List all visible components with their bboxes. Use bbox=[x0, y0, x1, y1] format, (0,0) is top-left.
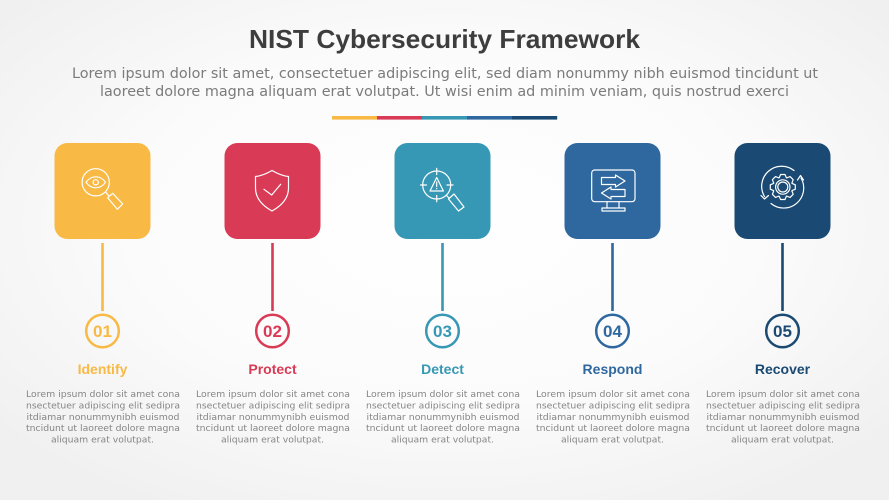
description: aliquam erat volutpat. bbox=[221, 434, 324, 446]
description: tncidunt ut laoreet dolore magna bbox=[366, 423, 520, 434]
icon tile: detect bbox=[394, 143, 490, 239]
icon: eye magnifier bbox=[82, 169, 123, 209]
icon tile: recover bbox=[734, 143, 830, 239]
panel: recover bbox=[706, 143, 860, 446]
description bbox=[196, 389, 350, 446]
icon tile: protect bbox=[224, 143, 320, 239]
description: itdiamar nonummynibh euismod bbox=[196, 412, 350, 423]
panel: detect bbox=[366, 143, 520, 446]
number badge 01: 01 bbox=[93, 322, 112, 341]
description: itdiamar nonummynibh euismod bbox=[26, 412, 180, 423]
subtitle text: Lorem ipsum dolor sit amet, consectetuer adipiscing elit, sed diam nonummy nibh euismod tincidunt ut bbox=[72, 66, 818, 82]
number badge 02 bbox=[256, 315, 289, 347]
connector line bbox=[611, 243, 614, 311]
description: Lorem ipsum dolor sit amet cona bbox=[26, 389, 180, 400]
icon: target alert magnifier bbox=[420, 168, 464, 211]
number badge 04 bbox=[596, 315, 629, 347]
connector line bbox=[101, 243, 104, 311]
connector line bbox=[271, 243, 274, 311]
heading: Protect: Protect bbox=[248, 361, 297, 377]
number badge 05: 05 bbox=[773, 322, 792, 341]
description: tncidunt ut laoreet dolore magna bbox=[196, 423, 350, 434]
description bbox=[536, 389, 690, 446]
panel: identify bbox=[26, 143, 180, 446]
description: Lorem ipsum dolor sit amet cona bbox=[196, 389, 350, 400]
icon: shield check bbox=[256, 170, 288, 211]
description: aliquam erat volutpat. bbox=[561, 434, 664, 446]
colour divider bbox=[332, 116, 557, 120]
connector line bbox=[781, 243, 784, 311]
description: nsectetuer adipiscing elit sedipra bbox=[366, 400, 520, 412]
description: nsectetuer adipiscing elit sedipra bbox=[196, 400, 350, 412]
icon: monitor with arrows bbox=[592, 170, 635, 211]
description: tncidunt ut laoreet dolore magna bbox=[26, 423, 180, 434]
title: NIST Cybersecurity Framework bbox=[249, 24, 641, 54]
description: tncidunt ut laoreet dolore magna bbox=[706, 423, 860, 434]
description bbox=[26, 389, 180, 446]
number badge 03: 03 bbox=[433, 322, 452, 341]
icon tile: respond bbox=[564, 143, 660, 239]
subtitle text bbox=[72, 66, 818, 100]
panel: protect bbox=[196, 143, 350, 446]
description bbox=[366, 389, 520, 446]
number badge 02: 02 bbox=[263, 322, 282, 341]
description: nsectetuer adipiscing elit sedipra bbox=[706, 400, 860, 412]
description: Lorem ipsum dolor sit amet cona bbox=[536, 389, 690, 400]
heading: Detect: Detect bbox=[421, 361, 464, 377]
icon: gear with cycle arrows bbox=[761, 166, 804, 208]
heading: Respond: Respond bbox=[583, 361, 642, 377]
description: Lorem ipsum dolor sit amet cona bbox=[706, 389, 860, 400]
description: nsectetuer adipiscing elit sedipra bbox=[26, 400, 180, 412]
description: itdiamar nonummynibh euismod bbox=[366, 412, 520, 423]
number badge 04: 04 bbox=[603, 322, 622, 341]
icon tile: identify bbox=[54, 143, 150, 239]
heading: Identify: Identify bbox=[78, 361, 128, 377]
description bbox=[706, 389, 860, 446]
description: nsectetuer adipiscing elit sedipra bbox=[536, 400, 690, 412]
description: tncidunt ut laoreet dolore magna bbox=[536, 423, 690, 434]
number badge 03 bbox=[426, 315, 459, 347]
description: itdiamar nonummynibh euismod bbox=[706, 412, 860, 423]
description: aliquam erat volutpat. bbox=[51, 434, 154, 446]
number badge 05 bbox=[766, 315, 799, 347]
connector line bbox=[441, 243, 444, 311]
description: aliquam erat volutpat. bbox=[731, 434, 834, 446]
description: Lorem ipsum dolor sit amet cona bbox=[366, 389, 520, 400]
panel: respond bbox=[536, 143, 690, 446]
subtitle text: laoreet dolore magna aliquam erat volutpat. Ut wisi enim ad minim veniam, quis nostrud exerci bbox=[100, 84, 789, 100]
number badge 01 bbox=[86, 315, 119, 347]
description: aliquam erat volutpat. bbox=[391, 434, 494, 446]
heading: Recover: Recover bbox=[755, 361, 811, 377]
description: itdiamar nonummynibh euismod bbox=[536, 412, 690, 423]
